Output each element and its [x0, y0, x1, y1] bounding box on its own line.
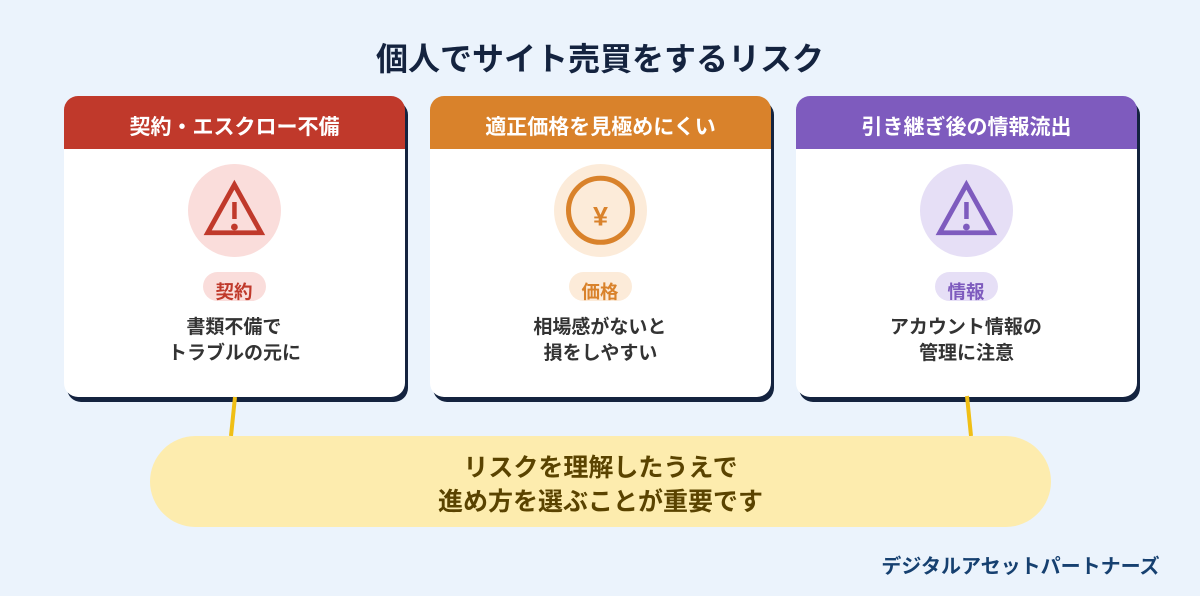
description: 管理に注意 [919, 341, 1014, 364]
icon: warning triangle [188, 164, 281, 257]
connector: card 3 to banner [967, 396, 971, 436]
tag: contract [203, 272, 266, 302]
panel heading: 引き継ぎ後の情報流出 [862, 115, 1072, 139]
panel: fair price [430, 96, 774, 402]
panel: contract risk [64, 96, 408, 402]
icon: yen coin: ¥ [593, 202, 608, 232]
callout banner [150, 436, 1051, 527]
panel: information leak [796, 96, 1140, 402]
connector: card 1 to banner [231, 397, 235, 436]
icon: yen coin [554, 164, 647, 257]
tag: price [569, 272, 632, 302]
description: アカウント情報の [890, 316, 1042, 338]
title: 個人でサイト売買をするリスク [376, 41, 824, 77]
description: 相場感がないと [533, 315, 666, 338]
tag: contract: 契約 [215, 282, 253, 302]
panel heading: 適正価格を見極めにくい [485, 116, 716, 139]
description: 損をしやすい [544, 342, 657, 364]
icon: warning triangle [920, 164, 1013, 257]
tag: information: 情報 [947, 282, 985, 302]
panel heading: 契約・エスクロー不備 [130, 116, 340, 139]
tag: price: 価格 [581, 282, 619, 302]
description: トラブルの元に [168, 341, 301, 364]
description: 書類不備で [186, 315, 281, 338]
callout banner: 進め方を選ぶことが重要です [438, 487, 763, 516]
callout banner: リスクを理解したうえで [463, 454, 738, 482]
footer brand: デジタルアセットパートナーズ [881, 554, 1160, 578]
tag: information [935, 272, 998, 302]
